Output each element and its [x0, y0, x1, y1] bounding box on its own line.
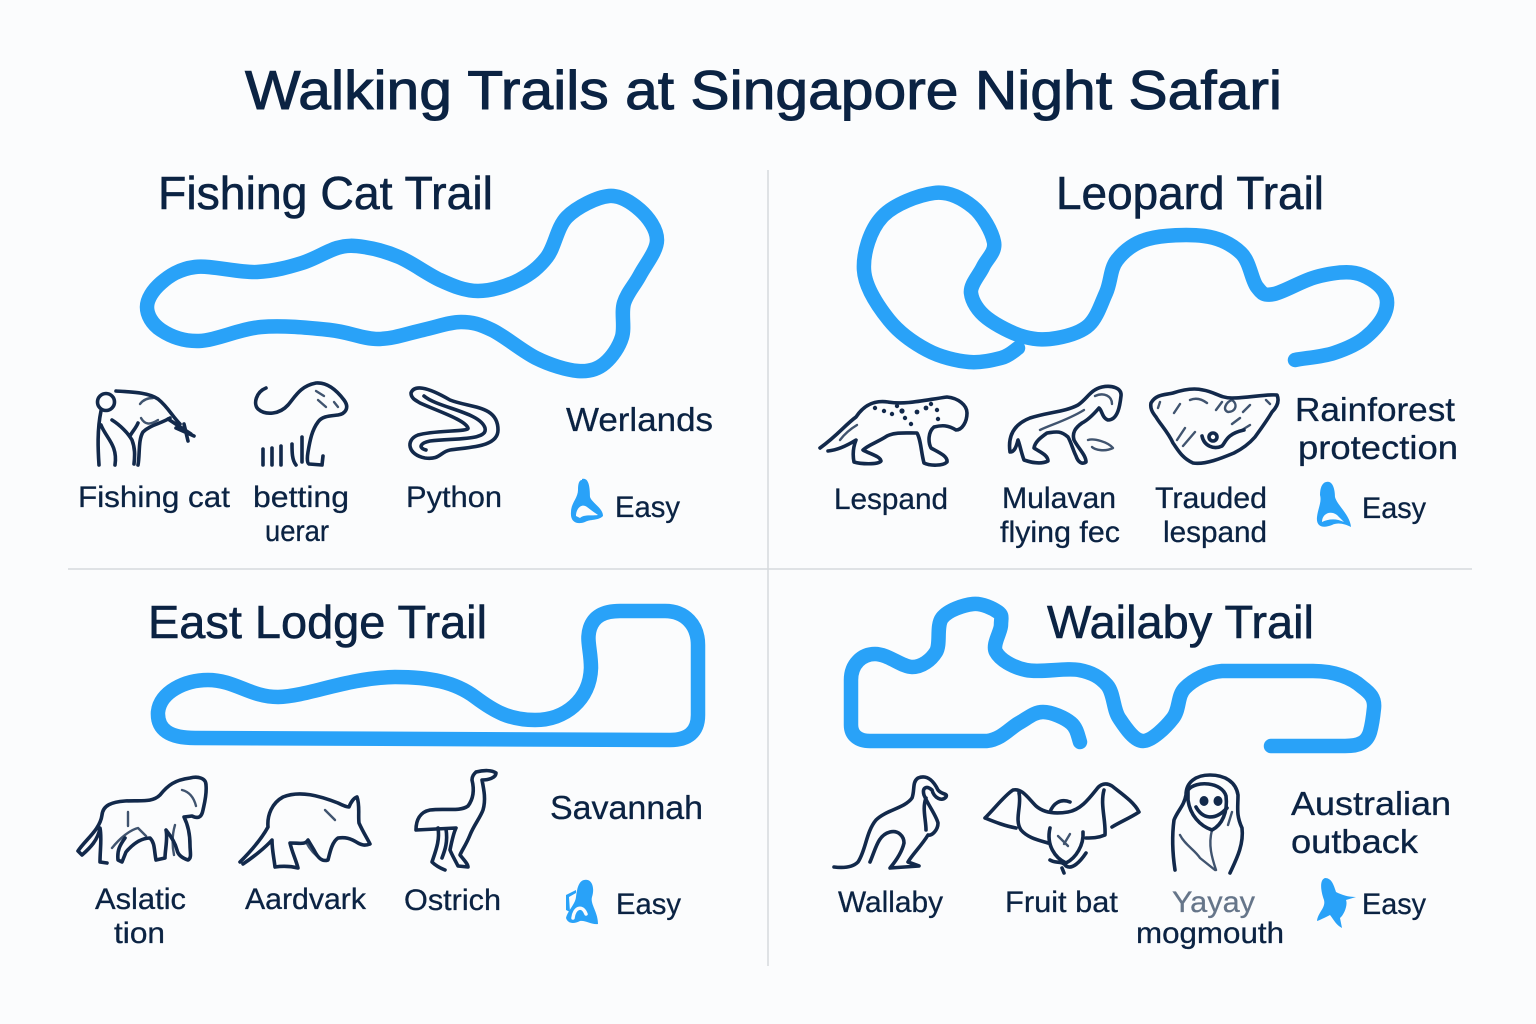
trail map: Leopard Trail	[864, 193, 1387, 362]
label: Easy: Easy	[1362, 888, 1426, 921]
icon: fishing cat	[98, 391, 194, 465]
label: Frogmouth: mogmouth	[1136, 917, 1284, 950]
heading: Fishing Cat Trail: Fishing Cat Trail	[158, 167, 493, 219]
habitat: Rainforest protection	[1295, 391, 1458, 466]
difficulty: Easy	[1317, 878, 1426, 928]
icon: wallaby	[834, 777, 946, 868]
label: Frogmouth	[1136, 886, 1284, 950]
trail map: East Lodge Trail	[158, 611, 698, 740]
label: Wallaby: Wallaby	[838, 886, 943, 919]
label: Frogmouth: Yayay	[1172, 886, 1255, 919]
label: Mulavan flying fox	[1000, 482, 1120, 549]
label: betting uear: betting	[253, 481, 349, 514]
label: Fruit bat: Fruit bat	[1005, 886, 1119, 919]
panel: East Lodge Trail	[78, 596, 703, 950]
icon: frogmouth	[1173, 775, 1242, 873]
label: Clouded leopard: Trauded	[1155, 482, 1267, 515]
habitat: Australian outback	[1291, 785, 1451, 860]
icon: hiker	[1317, 878, 1356, 928]
label: Asiatic lion: Aslatic	[95, 883, 186, 916]
heading: Wailaby Trail: Wailaby Trail	[1047, 596, 1314, 648]
label: Mulavan flying fox: Mulavan	[1002, 482, 1116, 515]
label: betting uear	[253, 481, 349, 548]
icon: fruit bat	[985, 784, 1139, 873]
icon: Asiatic lion	[78, 777, 206, 863]
icon: hiker	[1317, 482, 1351, 527]
trail map: Fishing Cat Trail	[147, 196, 657, 371]
title: Walking Trails at Singapore Night Safari	[245, 59, 1282, 121]
label: Easy: Easy	[615, 491, 680, 524]
label: Fishing cat: Fishing cat	[78, 481, 231, 514]
icon: leopard	[820, 397, 967, 465]
label: Easy: Easy	[616, 888, 681, 921]
panel: Wailaby Trail	[834, 596, 1451, 950]
habitat: Werlands: Werlands	[566, 401, 713, 438]
label: Clouded leopard	[1155, 482, 1267, 549]
label: Lespand: Lespand	[834, 483, 948, 516]
icon: clouded leopard head	[1151, 389, 1278, 463]
habitat: Savannah: Savannah	[550, 789, 703, 826]
label: Ostrich: Ostrich	[404, 884, 501, 917]
icon: betting uear	[256, 383, 347, 465]
panel: Fishing Cat Trail	[78, 167, 713, 548]
icon: hiker	[566, 880, 598, 924]
label: Asiatic lion	[95, 883, 186, 950]
label: Asiatic lion: tion	[114, 917, 165, 950]
heading: East Lodge Trail: East Lodge Trail	[148, 596, 487, 648]
icon: ostrich	[416, 771, 496, 870]
label: Aardvark: Aardvark	[245, 883, 367, 916]
habitat: Australian outback: Australian	[1291, 785, 1451, 822]
difficulty: Easy	[1317, 482, 1426, 527]
icon: hiker	[571, 479, 603, 523]
label: betting uear: uerar	[265, 515, 329, 548]
difficulty: Easy	[566, 880, 681, 924]
icon: aardvark	[240, 794, 370, 868]
panel: Leopard Trail	[820, 167, 1458, 549]
label: Python: Python	[406, 481, 502, 514]
trail map: Wailaby Trail	[851, 604, 1374, 746]
label: Clouded leopard: lespand	[1163, 516, 1267, 549]
habitat: Rainforest protection: Rainforest	[1295, 391, 1455, 428]
label: Easy: Easy	[1362, 492, 1426, 525]
difficulty: Easy	[571, 479, 680, 524]
habitat: Rainforest protection: protection	[1298, 429, 1458, 466]
icon: Mulavan flying fox	[1010, 386, 1121, 463]
heading: Leopard Trail: Leopard Trail	[1056, 167, 1324, 219]
icon: python	[410, 388, 498, 458]
label: Mulavan flying fox: flying fec	[1000, 516, 1120, 549]
habitat: Australian outback: outback	[1291, 823, 1419, 860]
